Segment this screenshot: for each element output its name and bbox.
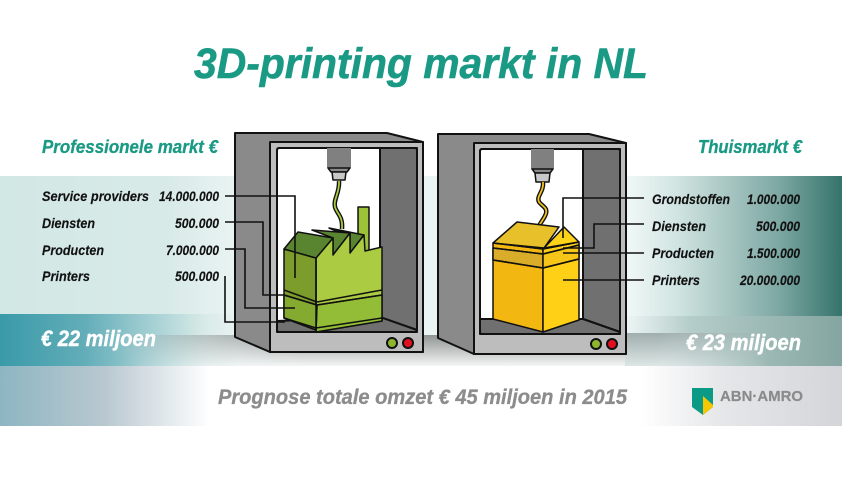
table: professional market	[42, 188, 219, 284]
panel: home market printer	[438, 134, 626, 354]
logo: ABN AMRO: ABN·AMRO	[720, 388, 803, 405]
leader lines right	[563, 198, 644, 280]
buttons right	[591, 339, 617, 349]
table: home market: 20.000.000	[739, 272, 800, 288]
print head right	[531, 149, 554, 226]
panel: professional market printer	[235, 133, 423, 352]
table: professional market: Service providers	[42, 188, 149, 204]
table: home market	[652, 191, 800, 288]
forecast text: Prognose totale omzet € 45 miljoen in 2015	[218, 386, 627, 409]
table: home market: 1.000.000	[747, 191, 800, 207]
table: professional market: Diensten	[42, 215, 95, 231]
printer body right	[438, 134, 626, 354]
table: home market: Grondstoffen	[652, 191, 730, 207]
print head left	[327, 148, 351, 229]
buttons left	[387, 338, 413, 348]
leader lines left	[225, 196, 295, 322]
table: professional market: 500.000	[175, 268, 219, 284]
table: home market: 500.000	[756, 218, 800, 234]
table: home market: Printers	[652, 272, 700, 288]
table: professional market: 500.000	[175, 215, 219, 231]
table: home market: Diensten	[652, 218, 706, 234]
table: professional market: 14.000.000	[159, 188, 219, 204]
printer body left	[235, 133, 423, 352]
table: professional market: Printers	[42, 268, 90, 284]
background bands	[0, 176, 842, 426]
heading: home market: Thuismarkt €	[698, 137, 803, 157]
total: professional market: € 22 miljoen	[41, 326, 156, 351]
table: home market: 1.500.000	[747, 245, 800, 261]
total: home market: € 23 miljoen	[686, 330, 801, 355]
logo: ABN AMRO	[692, 388, 803, 415]
table: professional market: 7.000.000	[166, 242, 219, 258]
carton model	[493, 222, 579, 332]
title: 3D-printing markt in NL	[194, 40, 648, 88]
heading: professional market: Professionele markt €	[42, 137, 219, 157]
table: home market: Producten	[652, 245, 714, 261]
table: professional market: Producten	[42, 242, 104, 258]
factory model	[284, 207, 382, 332]
